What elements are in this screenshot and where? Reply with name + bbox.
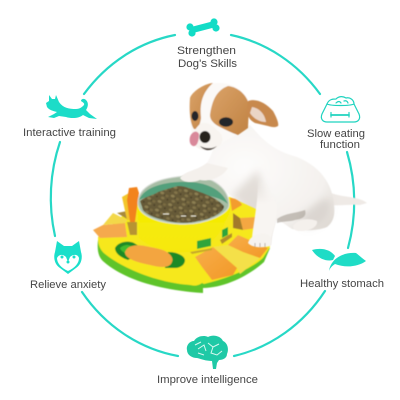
- label: relieve anxiety: Relieve anxiety: [30, 279, 107, 291]
- orange slider lower right: [228, 235, 268, 258]
- icon: shiba head: [54, 241, 82, 274]
- puppy front leg: [252, 180, 277, 240]
- puppy belly shade: [232, 170, 268, 222]
- orange slider bottom: [195, 247, 237, 280]
- brown slot right: [233, 213, 243, 230]
- label: slow eating function: [307, 128, 365, 151]
- icon: brain: [187, 336, 228, 369]
- label: interactive training: Interactive training: [23, 127, 116, 139]
- tongue: [190, 132, 199, 146]
- bowl window front: [197, 238, 211, 249]
- orange slider top right: [230, 198, 242, 211]
- label: improve intelligence: Improve intelligence: [157, 374, 258, 386]
- icon: food bowl: [321, 97, 360, 122]
- bowl wall: [137, 186, 230, 252]
- puppy arm on dome: [180, 163, 228, 182]
- right well: [165, 252, 185, 268]
- green glass band: [139, 182, 228, 204]
- orange oval slider: [125, 245, 172, 267]
- puppy toes: [255, 243, 265, 247]
- heading: strengthen dog's skills: [177, 45, 238, 70]
- yellow disc: [98, 197, 270, 286]
- inner ear: [250, 107, 266, 122]
- gold slot side: [220, 233, 232, 244]
- puppy head: [190, 83, 278, 150]
- ear: [247, 100, 278, 127]
- heading: strengthen dog's skills: Dog's Skills: [178, 58, 238, 70]
- puppy tail: [331, 193, 367, 205]
- icon: leaves: [312, 249, 366, 271]
- label: healthy stomach: Healthy stomach: [300, 278, 384, 290]
- gold slot left: [127, 222, 137, 235]
- puzzle toy: [93, 176, 270, 293]
- left well: [115, 242, 145, 260]
- puppy torso: [180, 125, 334, 245]
- orange slider left: [93, 223, 127, 238]
- food highlights: [163, 214, 196, 216]
- gold slot front: [190, 248, 212, 254]
- pale slider upright: [122, 193, 130, 220]
- heading: strengthen dog's skills: Strengthen: [177, 45, 236, 57]
- food pile: [140, 186, 224, 223]
- brown slot left: [117, 211, 127, 219]
- nose: [200, 131, 210, 143]
- label: slow eating function: function: [320, 139, 360, 151]
- icon: bone: [186, 18, 220, 37]
- mouth: [200, 146, 217, 150]
- orange slider upright: [127, 187, 139, 222]
- puppy front: [180, 83, 278, 247]
- left brown patch: [190, 83, 213, 129]
- orange slider right: [240, 217, 257, 230]
- puppy body: [180, 125, 367, 245]
- left well light: [120, 245, 131, 254]
- pale yellow slider: [103, 213, 127, 225]
- icon: running dog: [46, 95, 97, 119]
- puppy rear paw: [293, 219, 317, 231]
- pale sector: [213, 245, 260, 274]
- right eye: [219, 117, 233, 127]
- main brown patch: [210, 86, 249, 135]
- bowl window side: [222, 227, 228, 238]
- glass dome: [138, 176, 229, 224]
- left eye: [192, 111, 198, 121]
- puppy rear shadow: [277, 210, 306, 223]
- puppy haunch shade: [300, 199, 330, 228]
- green base: [98, 240, 270, 293]
- circle arcs: [51, 35, 354, 356]
- puppy front paw: [248, 234, 272, 247]
- muzzle: [193, 123, 222, 150]
- label: slow eating function: Slow eating: [307, 128, 365, 140]
